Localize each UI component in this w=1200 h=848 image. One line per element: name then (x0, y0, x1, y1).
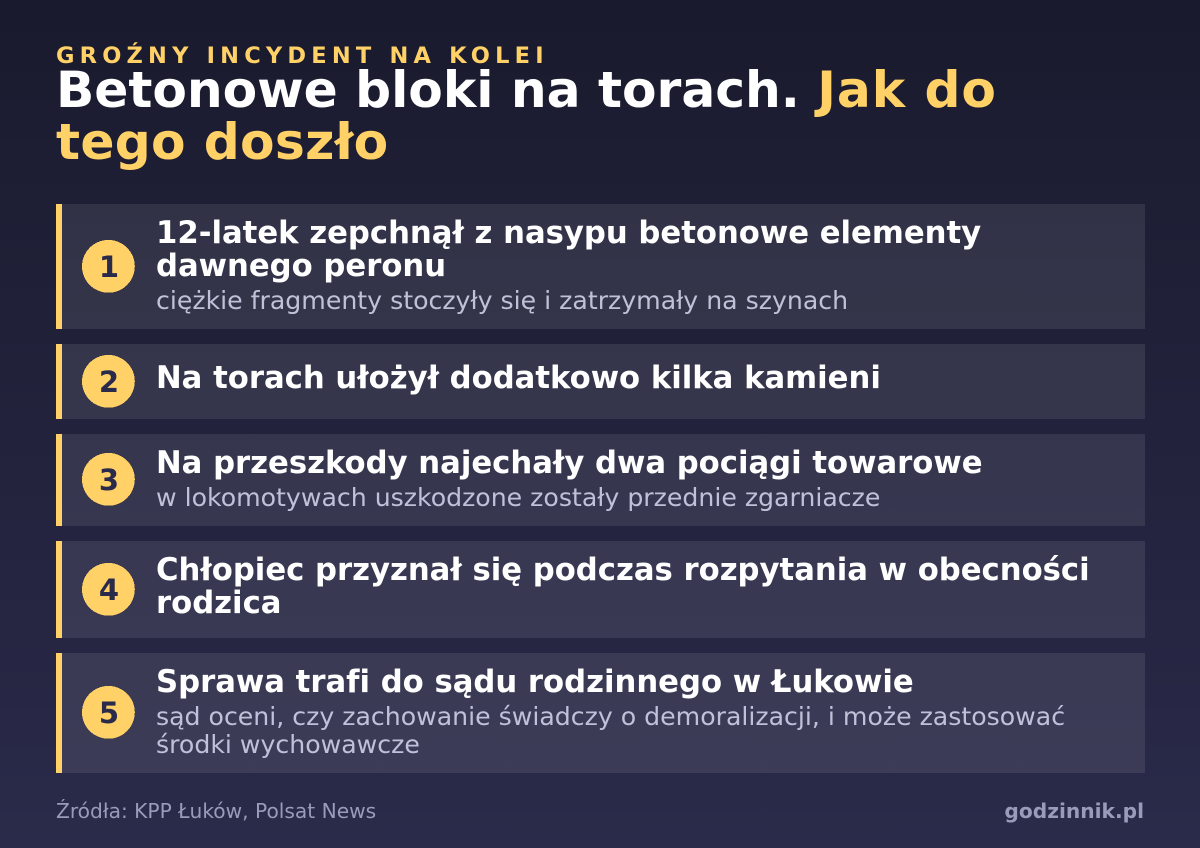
panel: step 2 (56, 344, 1145, 419)
step 5 heading: Sprawa trafi do sądu rodzinnego w Łukowie (156, 665, 914, 700)
step 2 heading: Na torach ułożył dodatkowo kilka kamieni (156, 361, 881, 396)
panel: step 3 (56, 434, 1145, 526)
step 1 detail: ciężkie fragmenty stoczyły się i zatrzymały na szynach (156, 286, 848, 315)
number badge 4 (82, 563, 135, 616)
step 5 detail (156, 702, 1065, 759)
step 1 heading: dawnego peronu (156, 249, 446, 284)
step 4 heading: rodzica (156, 586, 281, 621)
number badge 1 (82, 240, 135, 292)
panel: step 1 (56, 204, 1145, 329)
number badge 2 (82, 355, 135, 408)
title: tego doszło (56, 112, 389, 171)
step 3 detail: w lokomotywach uszkodzone zostały przednie zgarniacze (156, 483, 880, 512)
number badge 1: 1 (99, 250, 119, 284)
number badge 2: 2 (99, 365, 119, 399)
step 5 detail: sąd oceni, czy zachowanie świadczy o demoralizacji, i może zastosować (156, 702, 1065, 731)
panel: step 5 (56, 653, 1145, 773)
step 5 detail: środki wychowawcze (156, 730, 420, 759)
number badge 3: 3 (99, 463, 119, 497)
number badge 5: 5 (99, 696, 119, 730)
brand: godzinnik.pl (1004, 799, 1144, 823)
title (56, 60, 997, 171)
number badge 4: 4 (99, 573, 119, 607)
step 4 heading (156, 553, 1090, 621)
kicker: GROŹNY INCYDENT NA KOLEI (56, 43, 549, 69)
step 4 heading: Chłopiec przyznał się podczas rozpytania w obecności (156, 553, 1090, 588)
step 3 heading: Na przeszkody najechały dwa pociągi towarowe (156, 446, 983, 481)
number badge 3 (82, 453, 135, 506)
step 1 heading: 12-latek zepchnął z nasypu betonowe elementy (156, 216, 981, 251)
title: Betonowe bloki na torach. Jak do (56, 60, 997, 119)
number badge 5 (82, 686, 135, 738)
panel: step 4 (56, 541, 1145, 638)
sources: Źródła: KPP Łuków, Polsat News (56, 799, 376, 823)
step 1 heading (156, 216, 981, 284)
